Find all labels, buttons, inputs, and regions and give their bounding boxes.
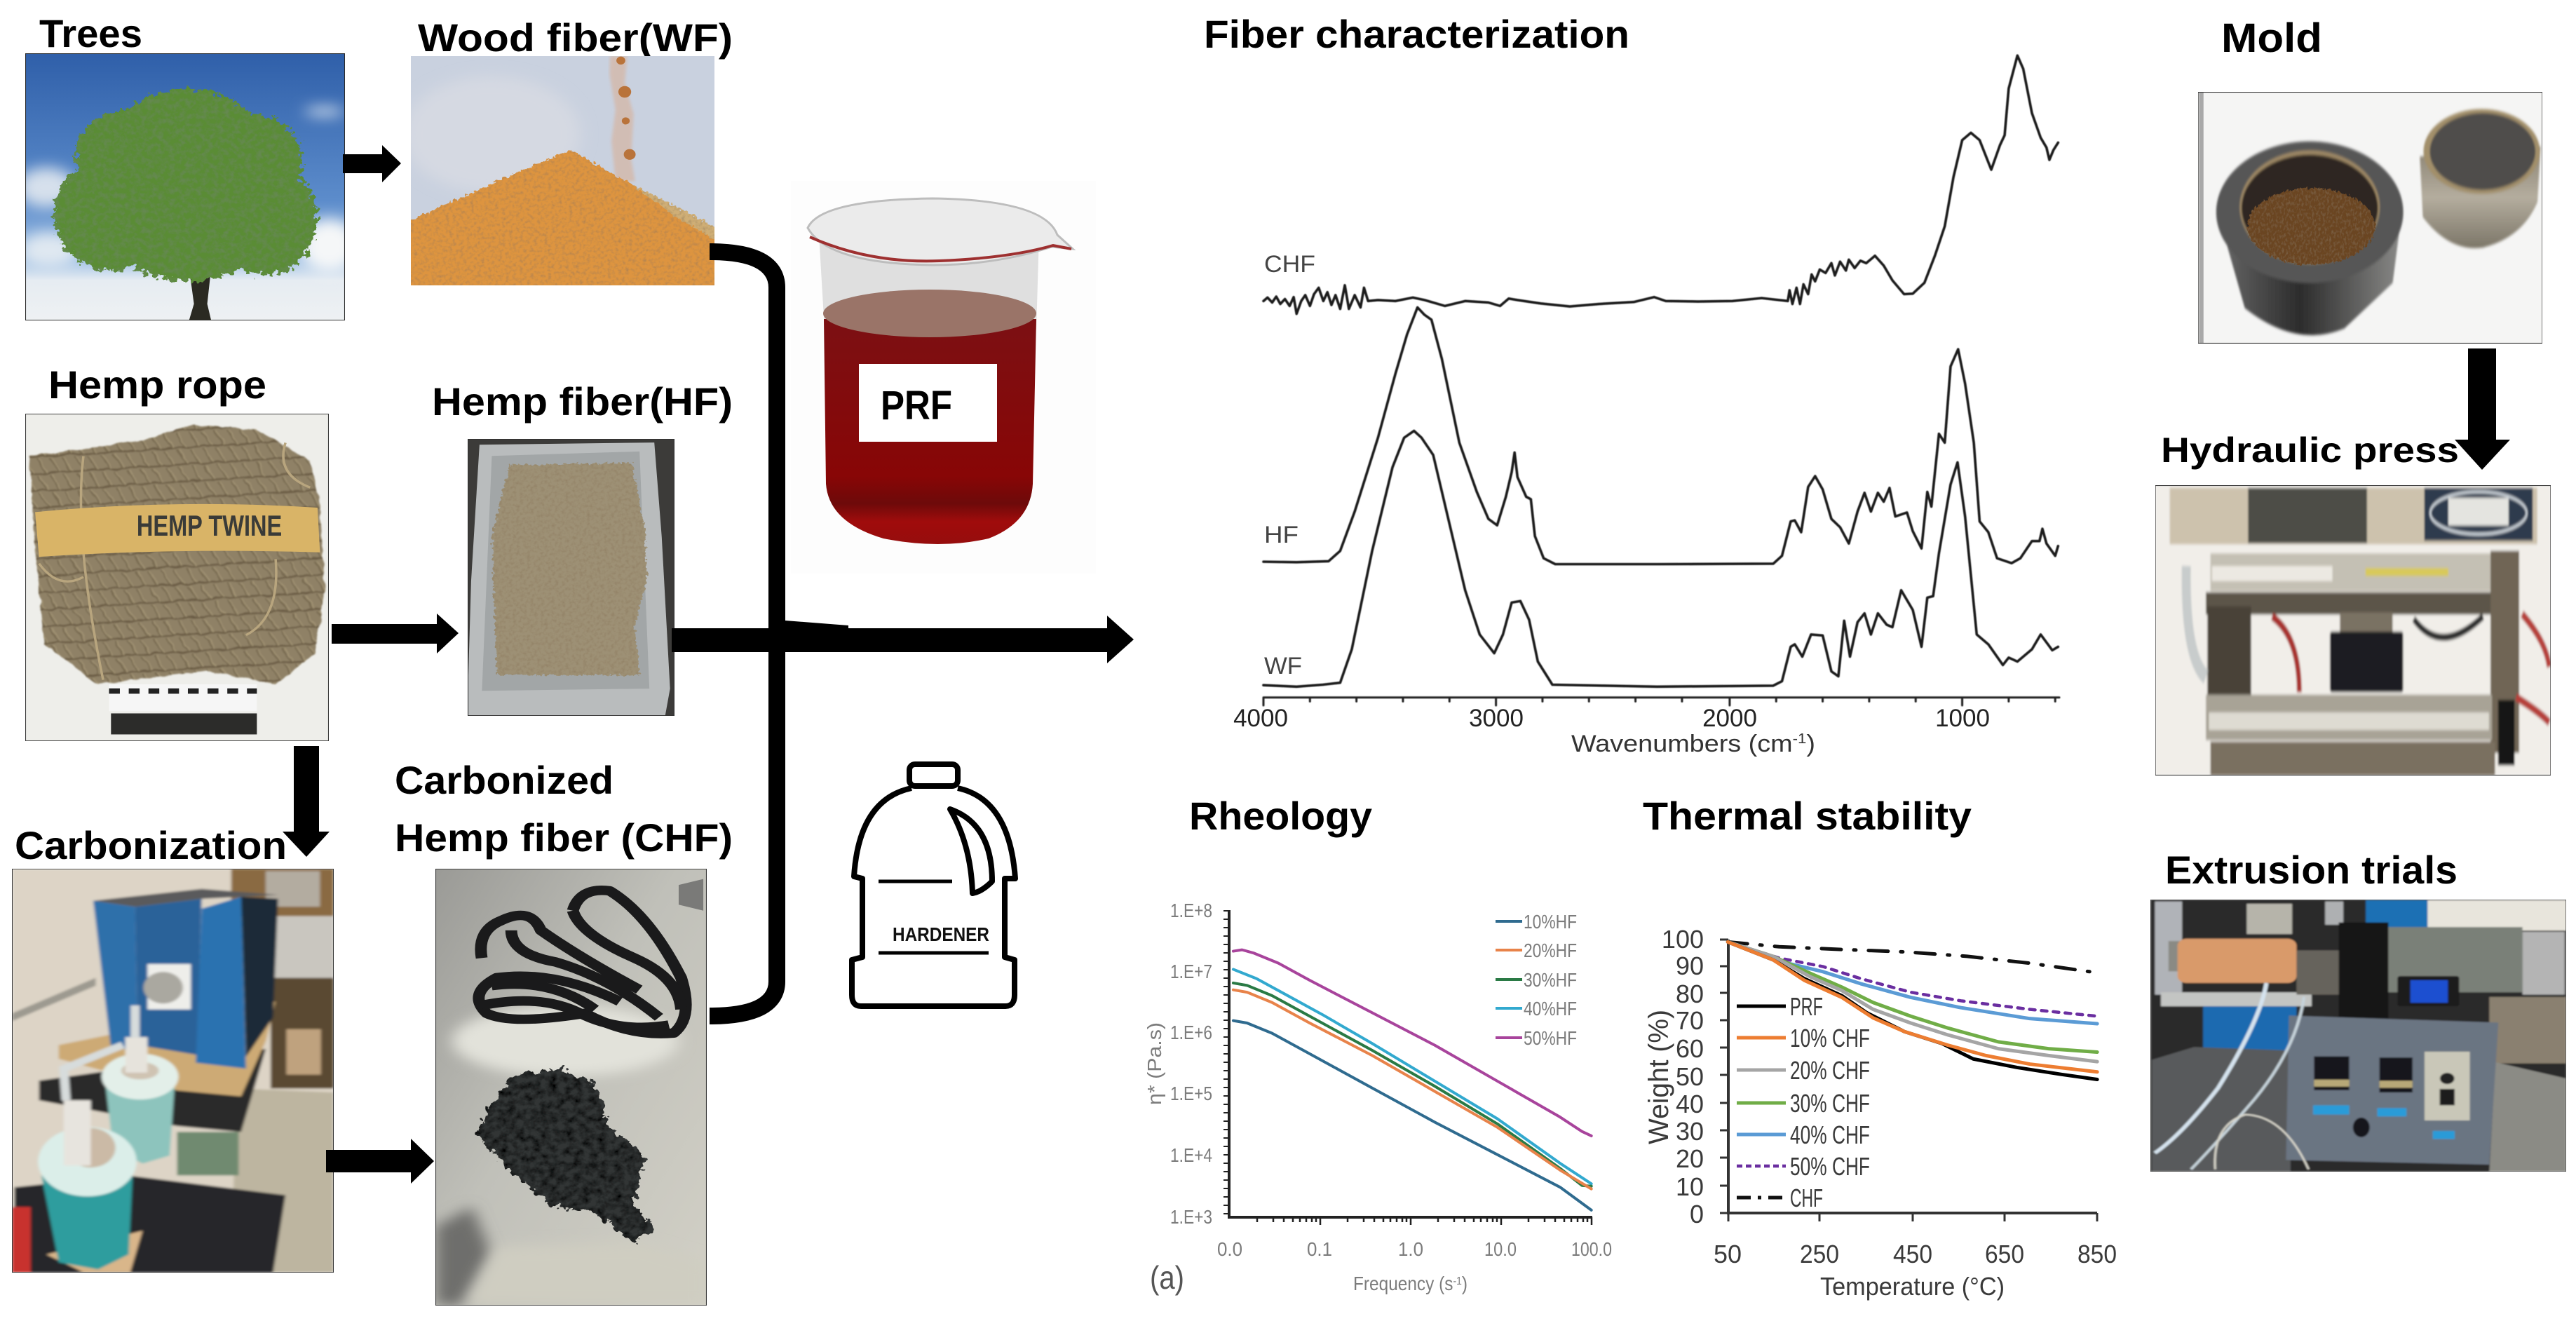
chart: complex viscosity vs frequency: 1.E+8 (1170, 900, 1212, 921)
heading: Rheology: Rheology (1189, 794, 1372, 838)
line: HF spectrum (1263, 307, 2058, 564)
chart: complex viscosity vs frequency: -1 (1453, 1275, 1462, 1287)
chart: complex viscosity vs frequency: Frequency (s (1353, 1273, 1467, 1294)
chart: complex viscosity vs frequency (1144, 900, 1612, 1296)
chart: complex viscosity vs frequency: 0.0 (1217, 1238, 1242, 1260)
chart: FTIR spectra: 2000 (1702, 705, 1757, 732)
chart: FTIR spectra: ) (1806, 731, 1815, 757)
arrow: carbonization to CHF (326, 1139, 434, 1184)
chart: TGA weight vs temperature: 650 (1985, 1240, 2024, 1268)
chart: complex viscosity vs frequency: 100.0 (1571, 1238, 1612, 1260)
line: CHF (1728, 942, 2097, 973)
chart: TGA weight vs temperature: 40 (1676, 1090, 1704, 1118)
legend: HF loadings: 30%HF (1524, 969, 1577, 991)
photo: hemp rope coil (25, 414, 329, 741)
photo: hemp fiber in tray (468, 439, 674, 716)
chart: TGA weight vs temperature: 70 (1676, 1006, 1704, 1035)
arrow: combined feed to characterization (672, 616, 1134, 663)
legend: HF loadings: 50%HF (1524, 1027, 1577, 1049)
legend: CHF loadings: CHF (1790, 1184, 1823, 1212)
icon: hardener bottle (852, 764, 1015, 1006)
chart: complex viscosity vs frequency: 1.E+6 (1170, 1022, 1212, 1043)
chart: FTIR spectra: 4000 (1233, 705, 1288, 732)
chart: complex viscosity vs frequency: 10.0 (1484, 1238, 1517, 1260)
chart: FTIR spectra: CHF (1264, 251, 1315, 278)
photo: wood fiber pile (411, 56, 714, 285)
chart: FTIR spectra: 3000 (1469, 705, 1524, 732)
connector: bracket joining WF, HF and CHF (710, 252, 777, 1016)
line: PRF (1728, 942, 2097, 1080)
line: 10% CHF (1728, 942, 2097, 1072)
chart: complex viscosity vs frequency: ) (1462, 1273, 1467, 1294)
heading: Carbonized hemp fiber: Hemp fiber (CHF) (395, 815, 733, 860)
label: PRF: PRF (881, 383, 952, 428)
chart: TGA weight vs temperature (1643, 925, 2117, 1301)
chart: complex viscosity vs frequency: 1.E+5 (1170, 1083, 1212, 1104)
chart: TGA weight vs temperature: 50 (1676, 1062, 1704, 1091)
chart: FTIR spectra: WF (1264, 653, 1302, 679)
line: 10% HF (1233, 1021, 1592, 1210)
chart: TGA weight vs temperature: Weight (%) (1643, 1010, 1674, 1144)
legend: HF loadings (1496, 911, 1577, 1049)
chart: FTIR spectra: -1 (1793, 731, 1806, 747)
legend: CHF loadings: 40% CHF (1790, 1120, 1870, 1149)
arrow: mold to hydraulic press (2455, 348, 2510, 470)
chart: TGA weight vs temperature: 250 (1800, 1240, 1839, 1268)
chart: TGA weight vs temperature: 80 (1676, 980, 1704, 1008)
chart: FTIR spectra: HF (1264, 522, 1299, 548)
heading: Carbonized hemp fiber: Carbonized (395, 758, 614, 802)
line: 50% CHF (1728, 942, 2097, 1016)
chart: TGA weight vs temperature: Temperature (°C) (1820, 1272, 2005, 1301)
chart: complex viscosity vs frequency: 1.0 (1398, 1238, 1423, 1260)
chart: complex viscosity vs frequency: 0.1 (1307, 1238, 1332, 1260)
line: 40% HF (1233, 969, 1592, 1184)
heading: Fiber characterization: Fiber characterization (1204, 12, 1629, 56)
line: 50% HF (1233, 950, 1592, 1136)
chart: complex viscosity vs frequency: 1.E+4 (1170, 1144, 1212, 1166)
chart: FTIR spectra: 1000 (1935, 705, 1990, 732)
legend: HF loadings: 10%HF (1524, 911, 1577, 933)
legend: HF loadings: 40%HF (1524, 998, 1577, 1019)
chart: TGA weight vs temperature: 20 (1676, 1144, 1704, 1173)
chart: TGA weight vs temperature: 30 (1676, 1117, 1704, 1146)
chart: TGA weight vs temperature: 60 (1676, 1034, 1704, 1063)
beaker: PRF resin (791, 181, 1096, 574)
chart: FTIR spectra: Wavenumbers (cm (1571, 731, 1770, 757)
line: 30% CHF (1728, 942, 2097, 1052)
arrow: trees to wood fiber (343, 145, 401, 182)
chart: TGA weight vs temperature: 90 (1676, 951, 1704, 980)
chart: TGA weight vs temperature: 0 (1690, 1200, 1704, 1228)
text: HARDENER: HARDENER (893, 923, 989, 945)
line: 20% HF (1233, 990, 1592, 1189)
chart: TGA weight vs temperature: 100 (1662, 925, 1704, 954)
photo: extruder with control box (2150, 900, 2566, 1172)
chart: TGA weight vs temperature: 850 (2077, 1240, 2117, 1268)
photo: tree against blue sky (25, 53, 345, 320)
legend: CHF loadings: 20% CHF (1790, 1056, 1870, 1085)
heading: Wood fiber: Wood fiber(WF) (418, 15, 733, 60)
heading: Extrusion trials: Extrusion trials (2165, 848, 2458, 892)
legend: CHF loadings: 30% CHF (1790, 1089, 1870, 1118)
legend: CHF loadings (1737, 992, 1870, 1212)
arrow: hemp rope to hemp fiber (332, 614, 459, 653)
photo: carbonization furnace setup (12, 869, 334, 1273)
chart: TGA weight vs temperature: 50 (1714, 1240, 1742, 1268)
chart: complex viscosity vs frequency: 1.E+3 (1170, 1206, 1212, 1228)
chart: FTIR spectra (1233, 55, 2059, 757)
chart: complex viscosity vs frequency: 1.E+7 (1170, 961, 1212, 982)
heading: Hemp rope: Hemp rope (48, 363, 266, 407)
heading: Mold: Mold (2221, 15, 2322, 61)
heading: Hemp fiber: Hemp fiber(HF) (432, 379, 733, 424)
legend: CHF loadings: 10% CHF (1790, 1024, 1870, 1052)
photo: hydraulic press (2155, 485, 2551, 775)
heading: Carbonized hemp fiber (395, 758, 733, 860)
tick: joint stub (785, 621, 848, 630)
heading: Carbonization: Carbonization (15, 823, 287, 867)
line: CHF spectrum (1263, 55, 2058, 314)
line: 30% HF (1233, 983, 1592, 1186)
label: PRF (859, 364, 997, 442)
photo: steel mold and plunger (2198, 92, 2542, 344)
line: 20% CHF (1728, 942, 2097, 1062)
arrow: hemp rope down to carbonization (283, 746, 330, 857)
line: WF spectrum (1263, 431, 2058, 686)
legend: CHF loadings: PRF (1790, 992, 1823, 1021)
chart: complex viscosity vs frequency: (a) (1150, 1259, 1184, 1296)
line: 40% CHF (1728, 942, 2097, 1024)
legend: HF loadings: 20%HF (1524, 940, 1577, 961)
photo: carbonized hemp rope and chopped fiber (435, 869, 707, 1306)
heading: Trees: Trees (39, 11, 142, 55)
legend: CHF loadings: 50% CHF (1790, 1152, 1870, 1181)
chart: TGA weight vs temperature: 450 (1893, 1240, 1932, 1268)
heading: Hydraulic press: Hydraulic press (2161, 431, 2459, 470)
chart: TGA weight vs temperature: 10 (1676, 1172, 1704, 1201)
heading: Thermal stability: Thermal stability (1643, 794, 1972, 838)
chart: complex viscosity vs frequency: η* (Pa.s) (1144, 1022, 1165, 1105)
